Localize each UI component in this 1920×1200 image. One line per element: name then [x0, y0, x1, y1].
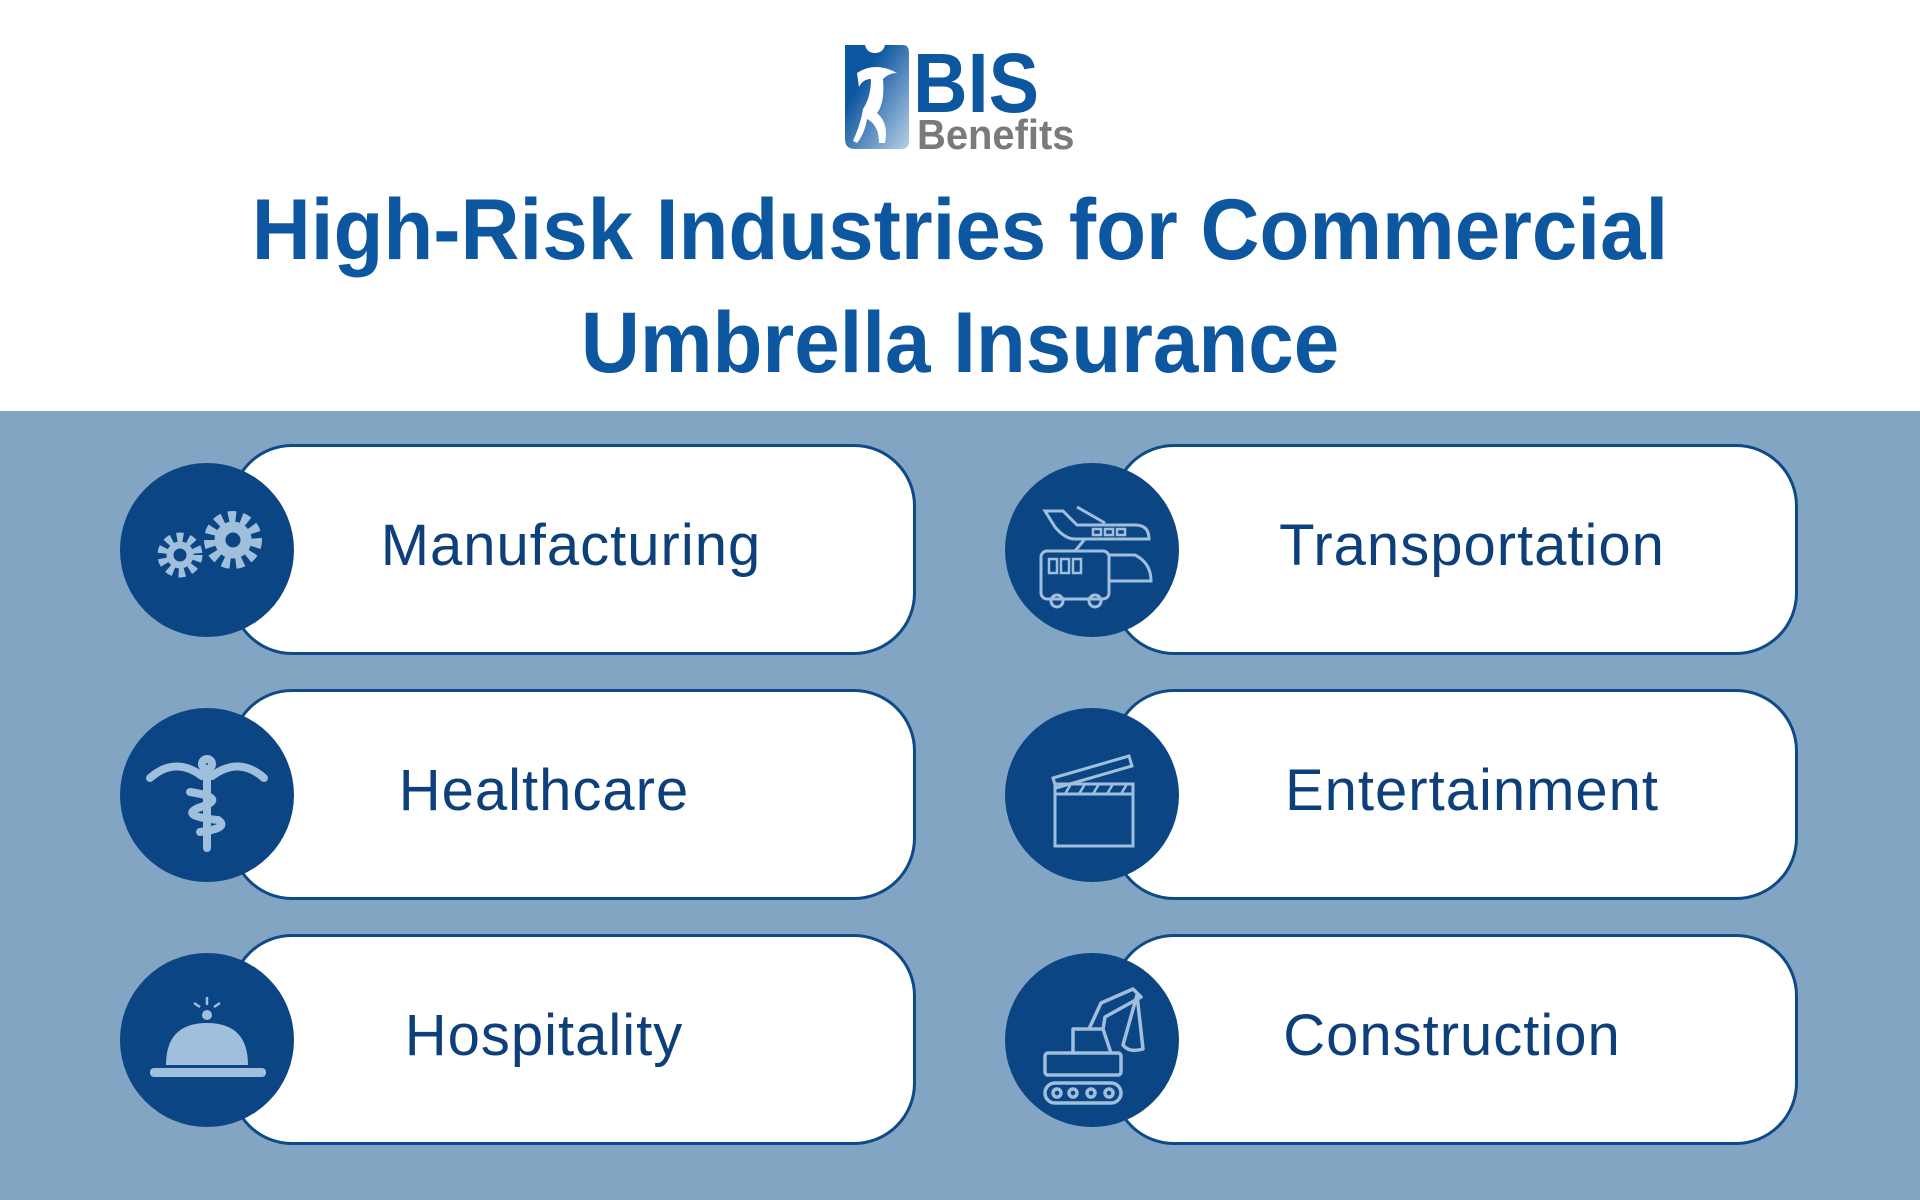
logo [845, 36, 1074, 158]
panel: hospitality [120, 934, 916, 1145]
icon: logo runner [845, 45, 909, 149]
panel: hospitality: Hospitality [405, 1003, 683, 1068]
panel: construction: Construction [1283, 1003, 1621, 1068]
panel: construction [1005, 934, 1798, 1145]
text: Umbrella Insurance [581, 295, 1339, 391]
panel: transportation [1005, 444, 1798, 655]
logo: Benefits [917, 111, 1074, 158]
logo text: BIS [913, 36, 1039, 130]
panel: healthcare [120, 689, 916, 900]
panel: entertainment [1005, 689, 1798, 900]
panel: healthcare: Healthcare [399, 758, 689, 823]
background band [0, 411, 1920, 1200]
title: High-Risk Industries for Commercial [252, 182, 1668, 278]
panel: entertainment: Entertainment [1285, 758, 1659, 823]
panel: manufacturing [120, 444, 916, 655]
panel: manufacturing: Manufacturing [381, 513, 761, 578]
panel: transportation: Transportation [1279, 513, 1665, 578]
